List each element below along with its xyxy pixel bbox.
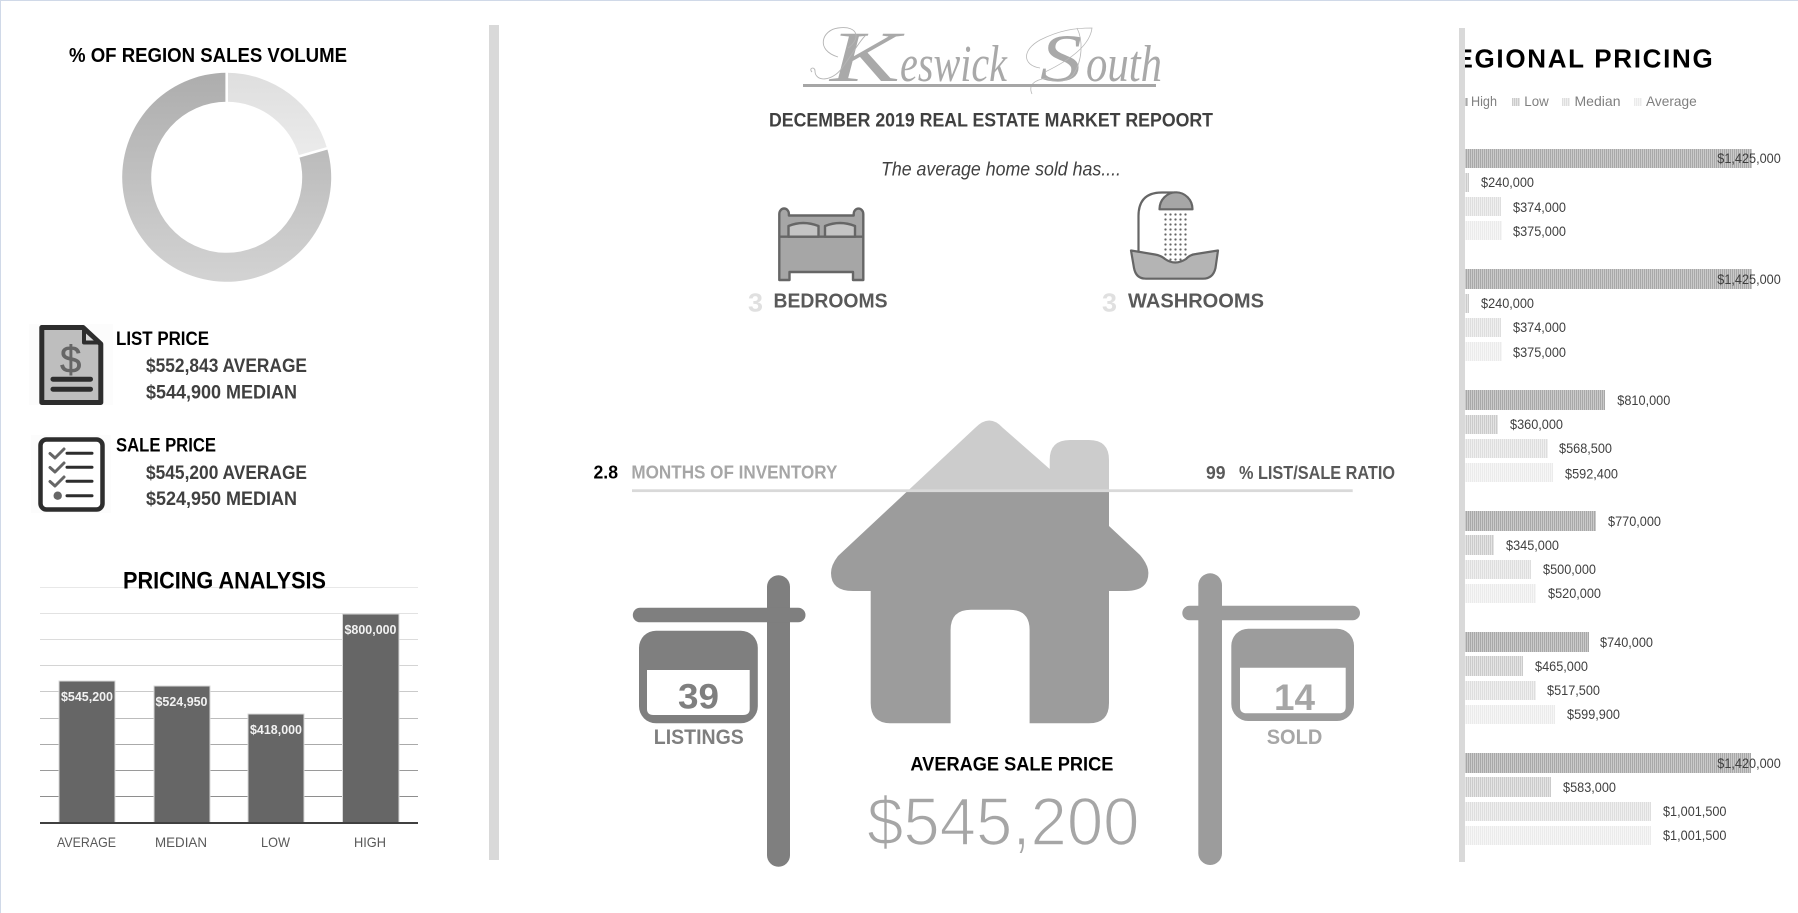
bar group 1: $375,000 xyxy=(1513,224,1566,239)
sign post xyxy=(1182,573,1360,865)
bar: median: $524,950 xyxy=(156,695,208,709)
bar: low: $418,000 xyxy=(250,723,302,737)
title: Keswick South xyxy=(803,17,1162,97)
bar group 5 xyxy=(1465,632,1653,724)
left divider xyxy=(489,25,499,860)
panel: washrooms xyxy=(1102,192,1264,318)
title: Keswick South: K xyxy=(829,17,906,97)
sign board xyxy=(1231,629,1354,721)
sign post xyxy=(633,575,806,867)
bar group 3: $568,500 xyxy=(1559,441,1612,456)
bar group 1 xyxy=(1465,149,1781,240)
bar group 3: $592,400 xyxy=(1565,467,1618,482)
sale price median: $524,950 MEDIAN xyxy=(146,489,297,510)
icon: price document xyxy=(29,324,113,405)
sold count: 14 xyxy=(1274,677,1315,718)
bar group 6: $1,001,500 xyxy=(1663,828,1726,843)
panel: pricing analysis chart xyxy=(40,568,418,850)
washroom count: 3 xyxy=(1102,288,1117,318)
bar group 5: $517,500 xyxy=(1547,683,1600,698)
title: Keswick South: eswick xyxy=(900,36,1008,93)
axis labels: HIGH xyxy=(354,834,386,850)
bar group 4: $345,000 xyxy=(1506,538,1559,553)
panel: sold sign xyxy=(1182,573,1360,865)
subtitle: DECEMBER 2019 REAL ESTATE MARKET REPOORT xyxy=(769,110,1213,132)
list price average: $552,843 AVERAGE xyxy=(146,356,307,377)
bar group 2: $1,425,000 xyxy=(1717,272,1781,287)
bar group 5: $599,900 xyxy=(1567,707,1620,722)
big number: average sale price: $545,200 xyxy=(867,784,1140,860)
list price median: $544,900 MEDIAN xyxy=(146,382,297,403)
bar group 6: $1,001,500 xyxy=(1663,804,1726,819)
sale price average: $545,200 AVERAGE xyxy=(146,463,307,484)
bar group 2 xyxy=(1465,269,1781,361)
bar group 5: $465,000 xyxy=(1535,659,1588,674)
legend: Median xyxy=(1574,93,1620,109)
stat: months of inventory: 2.8 xyxy=(594,462,618,482)
bar group 1: $1,425,000 xyxy=(1717,151,1781,166)
panel: sale price xyxy=(31,435,307,513)
legend xyxy=(1465,93,1697,109)
listings label: LISTINGS xyxy=(654,725,744,749)
icon: price document: $ xyxy=(60,340,81,382)
axis labels: AVERAGE xyxy=(57,834,116,850)
bar: average: $545,200 xyxy=(61,690,113,704)
bar: median xyxy=(154,686,210,823)
donut chart xyxy=(122,70,331,282)
bar group 1: $240,000 xyxy=(1481,175,1534,190)
stat: list/sale ratio: 99 xyxy=(1206,463,1226,483)
bar: low xyxy=(248,714,304,823)
panel: bedrooms xyxy=(748,208,888,318)
axis labels: LOW xyxy=(261,834,291,850)
icon: checklist xyxy=(31,435,111,513)
bar group 2: $240,000 xyxy=(1481,296,1534,311)
bar group 1: $374,000 xyxy=(1513,200,1566,215)
heading: pricing analysis: PRICING ANALYSIS xyxy=(123,568,326,595)
heading: sale price: SALE PRICE xyxy=(116,435,216,456)
stat: months of inventory: MONTHS OF INVENTORY xyxy=(631,462,837,482)
bedroom count: 3 xyxy=(748,288,763,318)
bar group 2: $375,000 xyxy=(1513,345,1566,360)
divider line: stats xyxy=(632,489,1353,492)
bar group 4: $770,000 xyxy=(1608,514,1661,529)
icon: shower and tub xyxy=(1131,192,1218,279)
bar: average xyxy=(59,681,115,823)
icon: house xyxy=(831,420,1148,723)
bedrooms label: BEDROOMS xyxy=(774,289,888,312)
bar group 6: $583,000 xyxy=(1563,780,1616,795)
panel: list price xyxy=(29,324,307,405)
panel: listings sign xyxy=(633,575,806,867)
bar: high: $800,000 xyxy=(344,623,397,637)
right divider xyxy=(1459,28,1465,862)
bar group 2: $374,000 xyxy=(1513,320,1566,335)
bar group 3 xyxy=(1465,390,1670,482)
bar group 3: $810,000 xyxy=(1617,393,1670,408)
panel: region sales volume xyxy=(69,45,347,282)
intro line: The average home sold has.... xyxy=(881,160,1121,181)
bar group 3: $360,000 xyxy=(1510,417,1563,432)
heading: list price: LIST PRICE xyxy=(116,329,209,350)
legend: Average xyxy=(1646,93,1697,109)
title: Keswick South: outh xyxy=(1086,36,1162,93)
icon: bed xyxy=(779,208,863,280)
bar group 6 xyxy=(1465,753,1781,845)
axis labels xyxy=(57,834,386,850)
axis labels: MEDIAN xyxy=(155,834,207,850)
listings count: 39 xyxy=(678,677,719,716)
heading: average sale price: AVERAGE SALE PRICE xyxy=(910,755,1113,776)
legend: Low xyxy=(1524,93,1550,109)
bar: high xyxy=(342,614,399,823)
panel: regional pricing xyxy=(1435,44,1781,845)
washrooms label: WASHROOMS xyxy=(1128,289,1264,312)
legend: High xyxy=(1471,93,1497,109)
stat: list/sale ratio: % LIST/SALE RATIO xyxy=(1239,463,1395,483)
sold label: SOLD xyxy=(1267,725,1322,749)
title underline xyxy=(803,84,1156,87)
title: Keswick South: S xyxy=(1040,20,1082,96)
heading: % of region sales volume: % OF REGION SALES VOLUME xyxy=(69,45,347,67)
bar group 4: $520,000 xyxy=(1548,586,1601,601)
sign board xyxy=(639,631,758,723)
bar group 4 xyxy=(1465,511,1661,603)
bar group 4: $500,000 xyxy=(1543,562,1596,577)
bar group 6: $1,420,000 xyxy=(1717,756,1781,771)
heading: regional pricing: REGIONAL PRICING xyxy=(1435,44,1713,74)
bar group 5: $740,000 xyxy=(1600,635,1653,650)
